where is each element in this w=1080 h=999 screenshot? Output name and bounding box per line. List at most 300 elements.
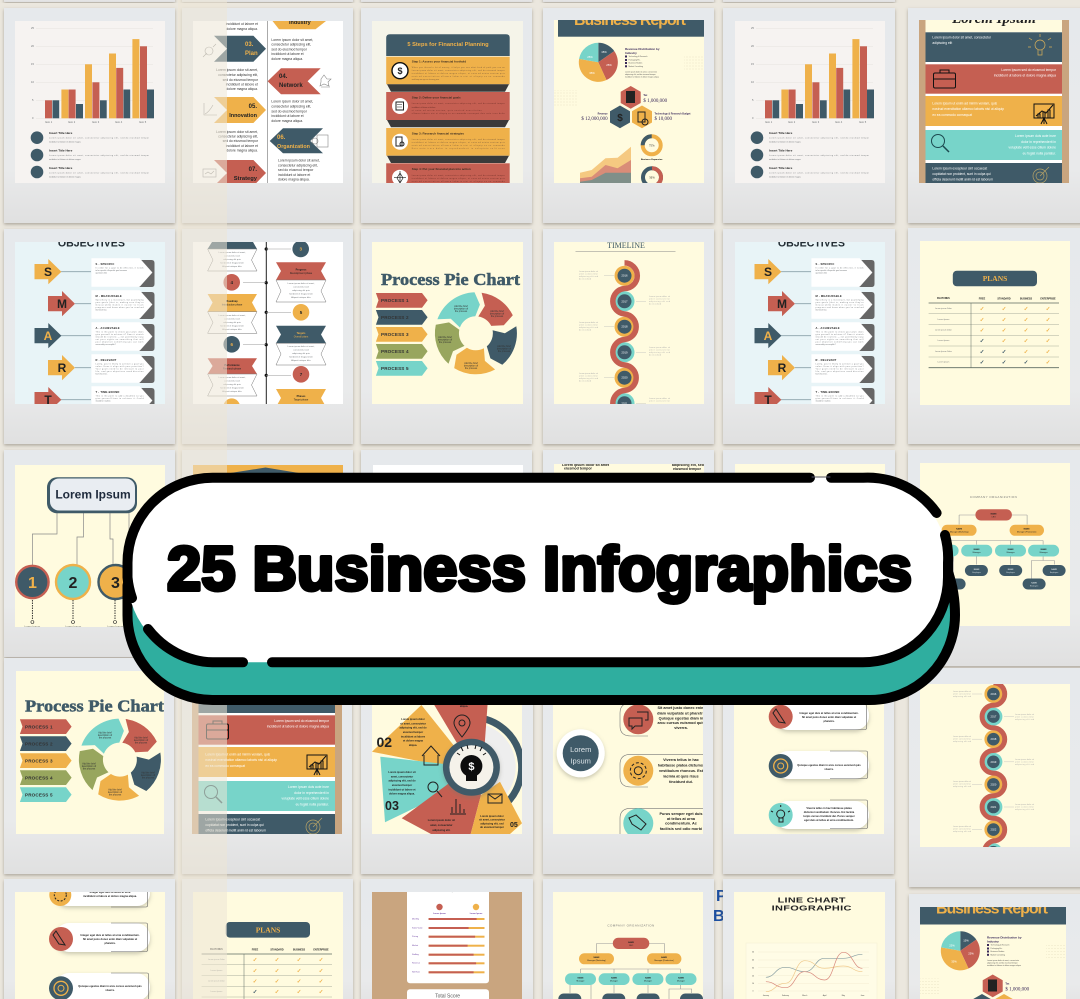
timeline notes: [579, 270, 670, 403]
arrow body text: consectetur adipiscing elit,: [218, 73, 258, 77]
timeline notes: Lorem ipsum dolor sit: [579, 372, 598, 375]
cards: life, and your objectives need direction: [816, 370, 864, 373]
timeline notes: amet consectetur: [579, 374, 598, 378]
heading: Process Pie Chart: [25, 696, 164, 715]
serpentine timeline: 2017: [991, 715, 997, 719]
panel: timeline page copy: [909, 668, 1080, 887]
timeline notes: amet consectetur: [649, 298, 670, 300]
serpentine timeline: 2020: [991, 782, 997, 786]
timeline notes: amet consectetur: [1015, 806, 1034, 808]
org chart: NAME: [1051, 568, 1058, 571]
process chevrons: PROCESS 3: [381, 332, 409, 337]
cards: should be realistic — not pointlessly easy: [96, 336, 144, 338]
wedge text: Lorem ipsum dolor sit: [388, 770, 416, 774]
hexagon budget figures: $ 1,000,000: [1005, 988, 1030, 992]
ribbons: Performance: [224, 364, 240, 367]
chart legend list: Lorem ipsum dolor sit amet, consectetur adipiscing elit, sed do eiusmod tempor: [769, 154, 869, 157]
title block: 5 Steps for Financial Planning: [407, 42, 489, 48]
steps: nostrud exercitation ullamco laboris nisi ut aliquip ex ea commodo: [412, 144, 505, 147]
stripes: Lorem Ipsum excepteur sint occaecat: [205, 818, 260, 822]
panel: business report page: [543, 8, 714, 223]
org chart: [921, 495, 1066, 590]
banner white pill: [128, 478, 948, 662]
letter arrows: S: [764, 265, 772, 279]
item text: at tellus at urna: [667, 817, 696, 821]
total score card: [407, 989, 489, 999]
pie legend: Market Consulting: [628, 65, 643, 68]
bar chart: 20: [31, 44, 34, 48]
process chevrons: PROCESS 2: [25, 741, 53, 746]
wedge text: incididunt ut labore: [401, 734, 426, 738]
ribbons: hendrerit et feugiat enim: [220, 386, 244, 390]
ribbons: consectetur sed: [224, 380, 240, 382]
cards: T - TIME-BOUND: [96, 390, 120, 394]
line chart: January: [763, 995, 769, 997]
report header: [558, 12, 704, 37]
panel: Lorem Ipsum bubbles page: [543, 659, 713, 874]
org chart: Manager (Production): [654, 959, 674, 962]
donut cycle chart: the process: [109, 793, 122, 796]
donut cycle chart: Add the brief: [464, 362, 478, 365]
cards: progress and know when you've reached: [96, 306, 144, 309]
cards: from this time.: [816, 372, 828, 376]
area chart: [580, 147, 631, 183]
bar chart: Item 4: [115, 120, 123, 124]
cards: should be realistic: [96, 400, 111, 402]
comparison table: ENTERPRISE: [1040, 297, 1056, 300]
number badges: 7: [300, 372, 303, 377]
serpentine timeline: 2021: [621, 401, 628, 405]
score card: Business Comparison: [432, 889, 462, 893]
comparison table: ✓: [297, 968, 302, 974]
comparison table: FEATURES: [210, 948, 223, 951]
item text: habitasse platea dictumst: [658, 763, 705, 767]
chart legend list: Insert Title Here: [49, 148, 73, 152]
item text: arcu cursus euismod quis: [657, 721, 705, 725]
org chart: NAME: [1008, 548, 1014, 551]
pie legend: incididunt ut labore et dolore magna aliqua: [625, 76, 659, 78]
timeline notes: Lorem ipsum dolor sit: [649, 295, 670, 298]
blue text fragment between cards: BE: [713, 908, 736, 925]
donut cycle chart: description of: [454, 308, 468, 310]
comparison table: ✓: [253, 968, 258, 974]
panel: timeline page: [543, 229, 714, 444]
comparison table: ✓: [980, 306, 985, 312]
timeline notes: amet consectetur: [953, 738, 971, 740]
org chart: Manager: [939, 552, 947, 554]
dotted stems: [24, 600, 124, 628]
panel: Lorem Ipsum banner page: [908, 8, 1080, 223]
stripes: incididunt ut labore et dolore magna aliqua: [994, 74, 1056, 78]
serpentine timeline: 2016: [991, 692, 997, 696]
chart legend list: [751, 131, 869, 186]
comparison table: [929, 297, 1059, 368]
wedge text: et dolore magna: [403, 739, 424, 743]
item text: diam vulputate ut pharetra: [657, 711, 706, 715]
wedge numbers: 03: [385, 799, 399, 813]
steps: Step 3: Research financial strategies: [412, 132, 464, 136]
arrow body text: Lorem ipsum dolor sit amet,: [278, 159, 320, 163]
score card: Net Rate: [412, 970, 421, 974]
timeline notes: Lorem ipsum dolor sit: [1015, 713, 1034, 716]
arrow labels: Organization: [277, 144, 310, 150]
stripes: nostrud exercitation ullamco laboris nisi ut aliquip: [932, 107, 1004, 111]
donut cycle chart: [435, 292, 517, 374]
panel: business comparison scores page: [361, 879, 533, 999]
steps: ut enim ad minim veniam, quis nostrud exercitation: [412, 109, 482, 112]
comparison table: ✓: [980, 360, 985, 366]
comparison table: ✓: [1002, 338, 1007, 344]
panel: hidden cream page: [723, 450, 895, 655]
timeline notes: Lorem ipsum dolor sit: [579, 321, 598, 324]
chart legend list: Insert Title Here: [769, 131, 793, 135]
hexagon budget figures: $ 12,000,000: [581, 117, 608, 122]
org chart: Employee: [972, 572, 981, 574]
ribbons: [208, 237, 326, 407]
timeline notes: amet consectetur: [579, 324, 598, 326]
report header: [920, 900, 1066, 924]
arrow labels: 07.: [249, 167, 257, 173]
wedge text: amet, consectetur: [430, 823, 453, 827]
stripes: Lorem ipsum dolor sit amet, consectetur: [932, 36, 992, 40]
timeline notes: amet consectetur: [953, 692, 971, 696]
panel: company organization page copy: [543, 879, 714, 999]
script title: Lorem Ipsum: [951, 11, 1036, 27]
arrow body text: sed do eiusmod tempor: [223, 78, 259, 82]
item outlines: [620, 703, 703, 834]
item text: facilisis sed odio morbi: [660, 827, 702, 831]
letter arrows: R: [778, 361, 787, 375]
timeline notes: amet consectetur: [953, 782, 971, 786]
pie chart: 25%: [587, 55, 593, 59]
timeline notes: Lorem ipsum dolor sit: [953, 735, 972, 738]
timeline notes: amet consectetur: [579, 272, 598, 276]
chart legend list: Insert Title Here: [49, 182, 73, 186]
chart legend list: [31, 131, 149, 186]
item text: lacinia at quis risus: [663, 774, 699, 778]
chart legend list: Lorem ipsum dolor sit amet, consectetur adipiscing elit, sed do eiusmod tempor: [769, 172, 869, 174]
arrow body text: sed do eiusmod tempor: [223, 139, 259, 143]
comparison table: FREE: [979, 297, 986, 300]
org chart: Manager: [610, 980, 618, 982]
timeline notes: amet consectetur: [1015, 760, 1034, 764]
pie legend: Market Consulting: [990, 954, 1005, 956]
cards: M - MEASURABLE: [96, 294, 122, 298]
timeline notes: adipiscing elit sed: [953, 740, 971, 743]
score card: Revenue: [412, 962, 421, 964]
letter arrows: T: [44, 393, 52, 407]
stripes: Lorem Ipsum sed do eiusmod tempor: [274, 719, 330, 723]
bar chart: Item 5: [859, 120, 867, 124]
timeline notes: do eiusmod: [649, 354, 661, 356]
timeline notes: do eiusmod: [579, 330, 591, 332]
ribbons: adipiscing elit quis: [292, 352, 311, 355]
org chart: Employee: [1006, 572, 1015, 574]
stripes: Lorem Ipsum ut enim ad minim veniam, quis: [932, 102, 997, 106]
comparison table: Lorem Ipsum Dolor: [935, 351, 952, 353]
org chart: NAME: [1041, 548, 1047, 551]
comparison table: ✓: [319, 968, 324, 974]
stripes: officia deserunt mollit anim id est laborum: [932, 178, 993, 182]
letter arrows: [34, 259, 75, 412]
bar chart: [751, 26, 874, 124]
timeline notes: do eiusmod: [649, 304, 661, 306]
org chart: NAME: [991, 512, 997, 516]
wedge text: do eiusmod tempor: [480, 825, 504, 829]
pie legend: Packaging Etc.: [990, 947, 1003, 950]
arrow body text: sed do eiusmod tempor: [278, 168, 314, 172]
donut cycle chart: Add the brief: [108, 788, 122, 791]
bar chart: Item 3: [92, 120, 100, 124]
comparison table: FREE: [252, 948, 259, 951]
stripes: Lorem Ipsum ut enim ad minim veniam, quis: [205, 752, 270, 756]
ribbons: consectetur sed: [224, 254, 240, 258]
comparison table: ✓: [297, 958, 302, 964]
org chart: Manager: [973, 552, 981, 554]
comparison table: ✓: [319, 958, 324, 964]
donut cycle chart: the process: [465, 367, 478, 370]
stripes: officia deserunt mollit anim id est laborum: [205, 828, 266, 832]
pie chart: 25%: [606, 63, 612, 67]
pills: [49, 880, 150, 999]
org chart: NAME: [578, 976, 584, 980]
steps: [386, 57, 510, 186]
stripes: [926, 32, 1062, 183]
letter arrows: A: [764, 329, 773, 343]
org chart: NAME: [1008, 568, 1014, 571]
cards: S - SPECIFIC: [96, 262, 114, 266]
cards: your objective something you can work: [816, 340, 864, 344]
banner title text: 25 Business Infographics: [167, 535, 912, 604]
cards: your objective something you can work: [96, 340, 144, 344]
cards: In order for a goal to be effective, it needs: [816, 266, 864, 270]
process chevrons: PROCESS 5: [381, 366, 409, 371]
donut cycle chart: [79, 719, 161, 801]
cards: give yourself time to achieve it. Could: [96, 397, 144, 400]
donut cycle chart: the process: [142, 776, 155, 779]
pie legend: [987, 936, 1022, 967]
arrow labels: 05.: [249, 104, 257, 110]
comparison table: ✓: [253, 990, 258, 996]
cards: the finish line.: [96, 308, 108, 312]
timeline notes: adipiscing elit sed: [1015, 808, 1034, 811]
arrow body text: dolore magna aliqua.: [226, 27, 258, 31]
cards: to be specific. A specific goal answers: [96, 269, 127, 272]
wedge numbers: [376, 734, 518, 829]
ribbons: hendrerit et feugiat enim: [289, 292, 313, 296]
panel: line chart page: [723, 879, 895, 999]
bar chart: Item 3: [812, 120, 820, 124]
pills: incididunt ut labore et dolore magna aliqua.: [83, 894, 137, 898]
bar chart: 25: [751, 26, 754, 30]
donut cycle chart: the process: [455, 310, 468, 313]
donut cycle chart: description of: [438, 338, 452, 342]
number badges: 4: [230, 280, 233, 285]
stripes: Lorem Ipsum sed do eiusmod tempor: [1001, 68, 1057, 72]
number badges: [223, 241, 309, 415]
ribbons: adipiscing elit quis: [223, 258, 242, 261]
cards: measurable) makes it easier to track: [96, 304, 144, 306]
comparison table: ✓: [1024, 318, 1029, 324]
donut cycle chart: description of: [497, 348, 511, 350]
timeline notes: adipiscing elit sed: [1015, 763, 1034, 766]
letter arrows: A: [44, 329, 53, 343]
timeline notes: do eiusmod: [579, 278, 591, 280]
panel: process pie chart page: [361, 229, 532, 444]
org chart: NAME: [1031, 582, 1038, 584]
cards: to be specific. A specific goal answers: [816, 269, 847, 272]
steps: When you thread a lot of money, it helps you see what kind of path you are on: [412, 66, 505, 69]
org chart: Manager: [644, 980, 652, 982]
stripes: incididunt ut labore et dolore magna aliqua: [267, 724, 329, 728]
panel: bar chart page copy: [723, 8, 895, 223]
panel: pill list page copy: [4, 879, 175, 999]
connector lines: [32, 513, 129, 568]
hexagon budget figures: Revenue: [598, 112, 608, 116]
ribbons: Lorem ipsum dolor sit amet,: [218, 314, 246, 317]
org chart: Manager: [1007, 552, 1015, 554]
arrow labels: Plan: [245, 51, 258, 57]
hexagon budget figures: $ 1,000,000: [643, 99, 668, 104]
panel: 5 steps financial planning page: [361, 8, 532, 223]
donut charts: [641, 136, 663, 186]
cards: This is the point to add a deadline so you: [816, 394, 864, 398]
wedge text: aliqua.: [409, 743, 417, 747]
pie chart: 35%: [589, 71, 595, 75]
numbered circles: [16, 565, 133, 599]
title box: [47, 477, 137, 513]
hexagon budget figures: $ 10,000: [654, 117, 672, 122]
cards: measurable) makes it easier to track: [816, 304, 864, 306]
steps: Lorem ipsum dolor sit amet, consectetur adipiscing elit, sed do eiusmod tempor: [412, 102, 505, 105]
comparison table: ✓: [980, 338, 985, 344]
letter arrows: T: [764, 393, 772, 407]
report header: Business Report: [574, 12, 687, 29]
chart legend list: Lorem ipsum dolor sit amet, consectetur adipiscing elit, sed do eiusmod tempor: [49, 154, 149, 157]
bar chart: 5: [752, 98, 754, 102]
arrow labels: [214, 20, 326, 186]
comparison table: Lorem ipsum Dolor: [208, 980, 225, 982]
arrow body text: Lorem ipsum dolor sit amet,: [271, 38, 313, 42]
wedge text: eiusmod tempor: [403, 730, 423, 734]
chart legend list: incididunt ut labore et dolore magna: [49, 140, 82, 144]
cards: reasonably accomplish?: [816, 343, 836, 346]
org chart: NAME: [661, 956, 668, 959]
cards: Lastly, you're likely to achieve a goal you: [816, 362, 864, 366]
process chevrons: PROCESS 5: [25, 792, 53, 797]
chart legend list: incididunt ut labore et dolore magna: [49, 158, 82, 161]
stripes: [198, 683, 335, 834]
comparison table: ✓: [1046, 318, 1051, 324]
score card: Market: [412, 944, 419, 947]
donut charts: Business Expansion: [641, 159, 663, 161]
panel: hidden yellow page: [182, 450, 353, 655]
cards: Specificity is a must-have, but quantifying: [816, 298, 864, 302]
cards: A - ACHIEVABLE: [816, 326, 840, 330]
serpentine timeline: 2020: [621, 376, 628, 380]
arrow labels: 06.: [277, 135, 286, 141]
ribbons: Aliquet tristique felis: [222, 328, 243, 331]
bar chart: Item 1: [45, 120, 53, 124]
timeline notes: adipiscing elit sed: [579, 377, 598, 380]
arrow body text: incididunt ut labore et: [271, 114, 304, 118]
donut cycle chart: Add the brief: [98, 731, 112, 734]
bar chart: 15: [751, 62, 754, 66]
pills: pharetra.: [823, 719, 835, 723]
comparison table: ✓: [275, 990, 280, 996]
bar chart: Item 2: [68, 120, 76, 124]
pills: [769, 701, 869, 829]
item text: Viverra tellus in hac: [663, 758, 699, 762]
org chart: NAME: [628, 941, 635, 944]
bar chart: Item 1: [765, 120, 773, 124]
comparison table: ✓: [253, 979, 258, 985]
line chart: 50: [752, 952, 754, 954]
cards: This is the point to check your plan: does: [816, 330, 864, 334]
pie legend: Industry: [625, 51, 637, 55]
pie chart: 35%: [951, 960, 957, 964]
cards: [91, 258, 154, 415]
row above: card edges: [4, 0, 895, 2]
panel: hidden white page: [361, 450, 532, 655]
donut cycle chart: description of: [98, 734, 112, 737]
pie legend: Lorem ipsum dolor sit amet, consectetur: [625, 70, 657, 74]
process chevrons: PROCESS 4: [381, 349, 409, 354]
ribbons: Lorem ipsum dolor sit amet,: [218, 376, 246, 379]
timeline notes: amet consectetur: [953, 828, 971, 830]
timeline notes: [953, 690, 1034, 833]
donut cycle chart: description of: [134, 739, 148, 742]
ribbons: hendrerit et feugiat enim: [220, 262, 244, 264]
dotted stems: Lorem Ipsum: [24, 624, 41, 628]
central bulb hub: $: [468, 761, 474, 773]
process chevrons: [20, 719, 72, 802]
comparison table: ✓: [1046, 350, 1051, 356]
connectors: [781, 272, 811, 400]
arrow body text: consectetur adipiscing elit,: [218, 134, 258, 138]
chart legend list: Lorem ipsum dolor sit amet, consectetur adipiscing elit, sed do eiusmod tempor: [769, 136, 869, 140]
chart legend list: incididunt ut labore et dolore magna: [49, 176, 82, 178]
paper crease overlay on second column: [178, 0, 227, 999]
comparison table: ✓: [297, 990, 302, 996]
hexagon budget figures: [972, 974, 1030, 999]
ring behind hub: [471, 717, 522, 807]
org chart: NAME: [1024, 528, 1030, 530]
panel: arrows strategy page: [182, 8, 353, 223]
stripes: nostrud exercitation ullamco laboris nisi ut aliquip: [205, 758, 277, 762]
comparison table: ✓: [1024, 338, 1029, 344]
chart legend list: Insert Title Here: [769, 148, 793, 152]
stripes: Lorem Ipsum duis aute irure: [1015, 134, 1056, 138]
org chart: Manager: [577, 980, 585, 982]
steps: Step 1: Assess your financial foothold: [412, 60, 466, 64]
heading: OBJECTIVES: [778, 238, 845, 250]
timeline notes: amet consectetur: [649, 400, 670, 402]
score card: Pricing: [412, 936, 418, 938]
pie chart: 25%: [968, 952, 974, 956]
item text: Quisque egestas diam in: [659, 716, 704, 720]
wedge text: [388, 704, 505, 832]
steps: incididunt ut labore et dolore magna aliqua, ut enim ad minim veniam quis: [412, 141, 505, 144]
blue text fragment between cards: [713, 888, 736, 925]
ribbons: Lorem ipsum dolor sit amet,: [288, 345, 315, 348]
cards: reasonably accomplish?: [96, 343, 116, 346]
hexagon budget figures: Tax: [1005, 982, 1010, 986]
wedge numbers: 05: [510, 822, 518, 829]
donut cycle chart: Add the brief: [490, 310, 504, 313]
stripes: ex ea commodo consequat: [205, 764, 245, 768]
number badges: 6: [230, 342, 233, 347]
